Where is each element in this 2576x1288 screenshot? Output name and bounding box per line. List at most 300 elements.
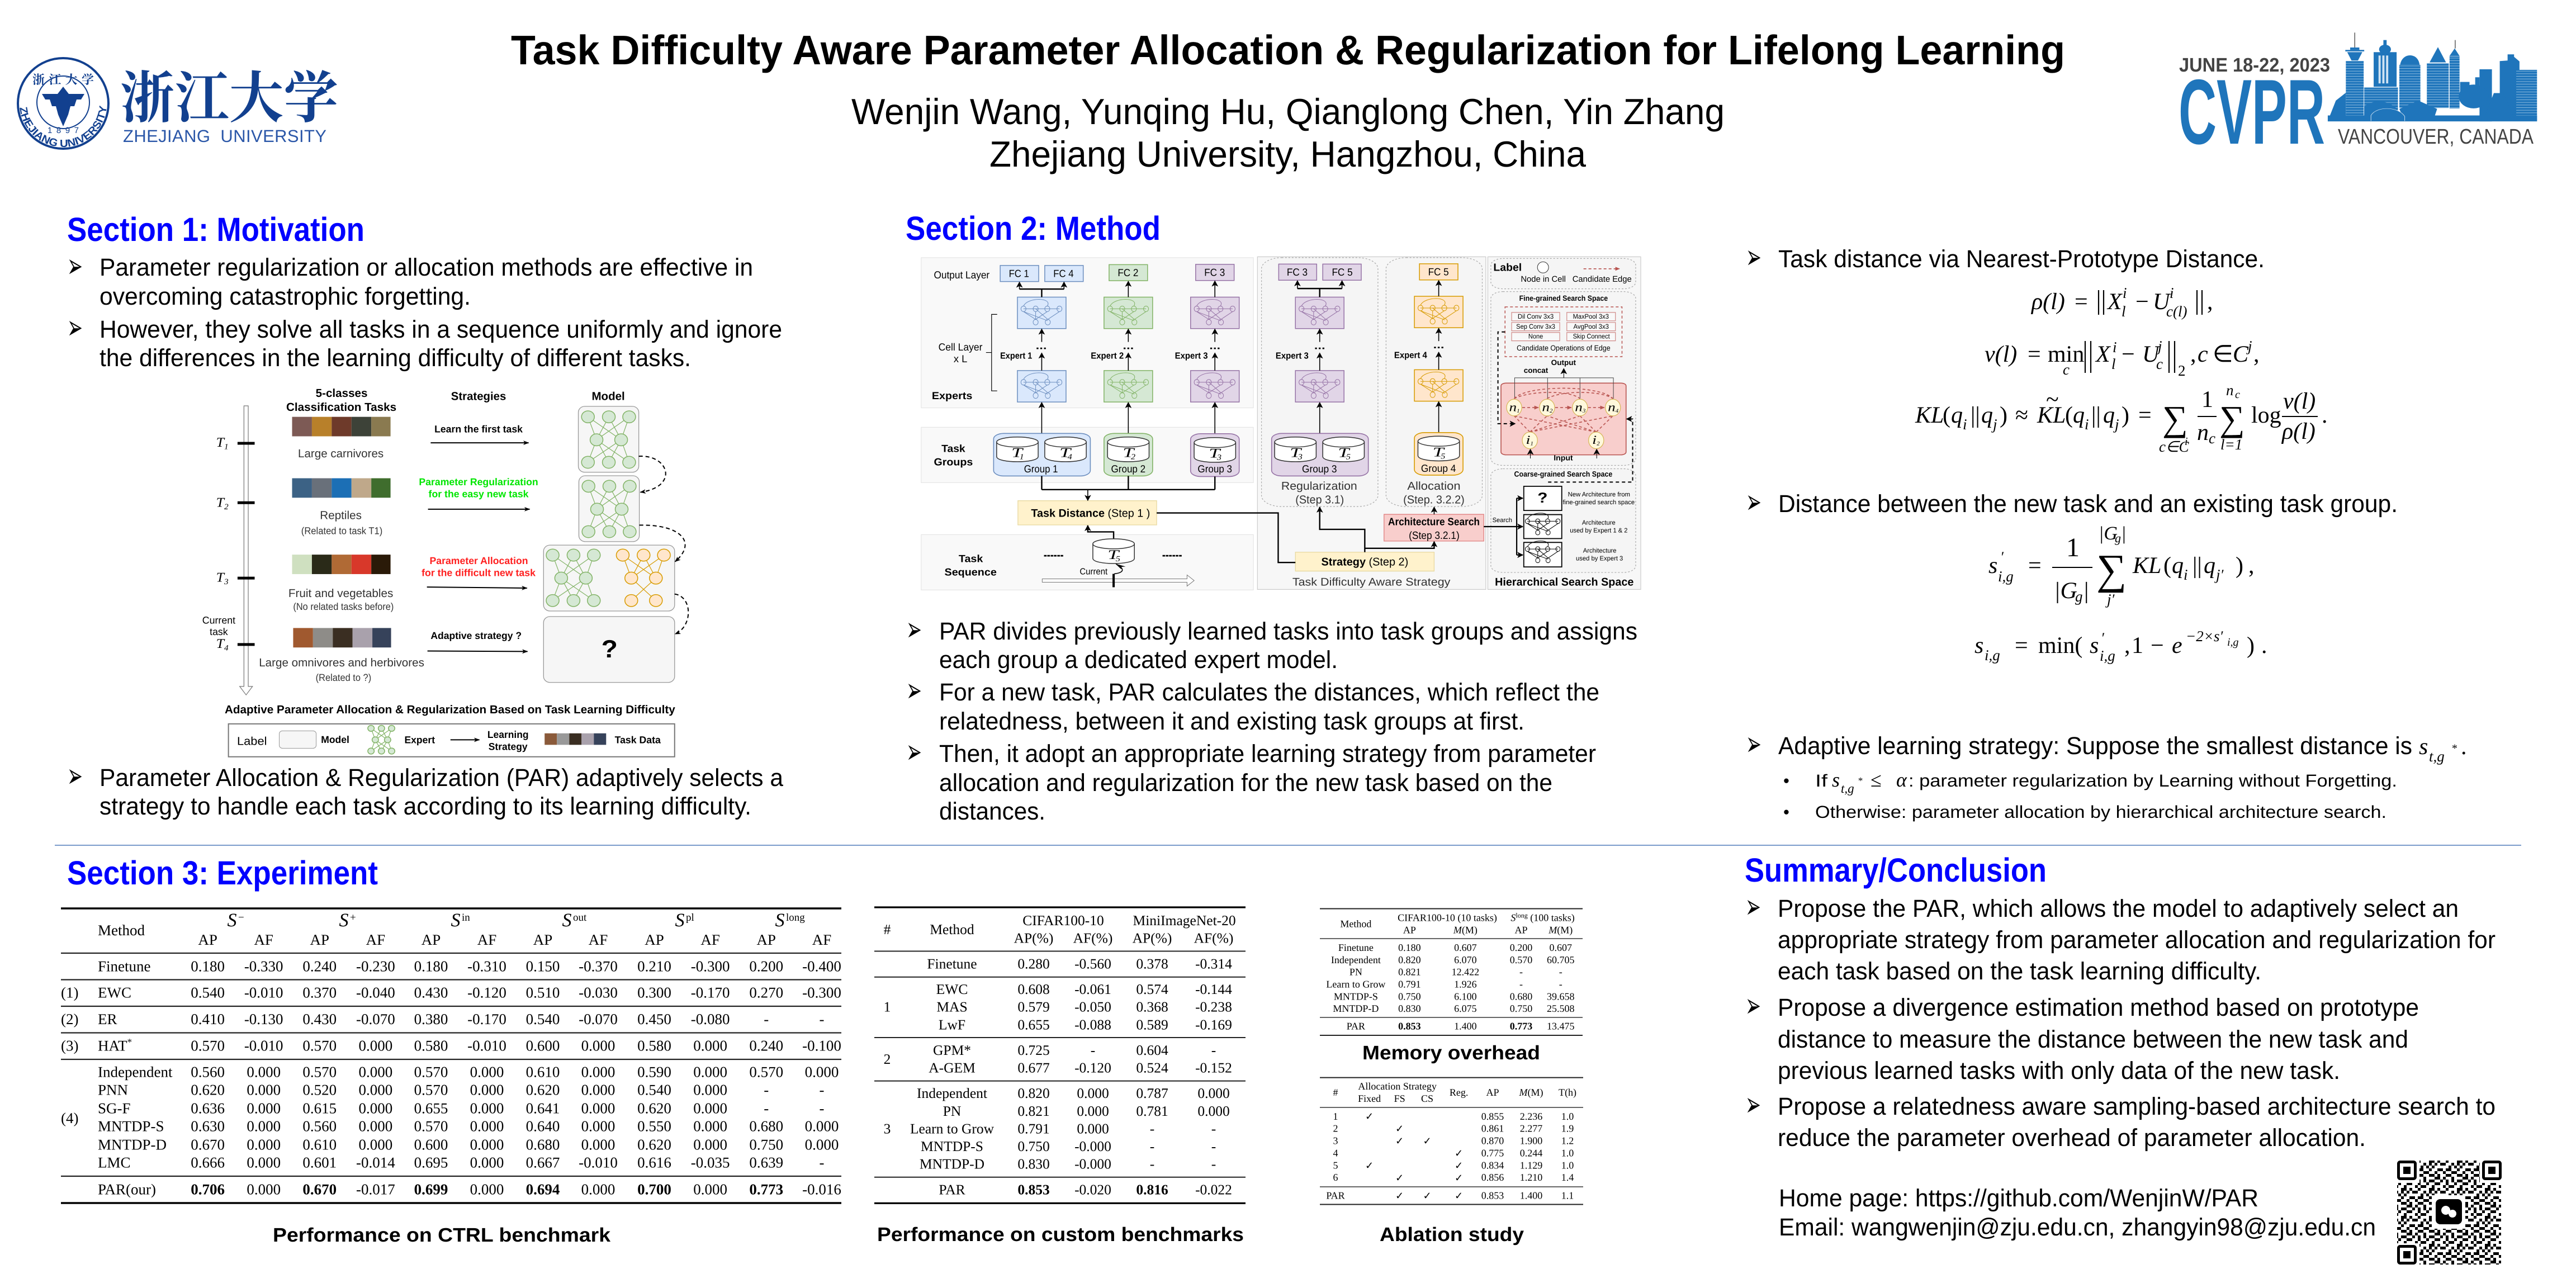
task groups: 5 bbox=[1441, 452, 1445, 461]
table rows: 0.680 bbox=[749, 1118, 783, 1135]
table rows: (2) bbox=[61, 1011, 78, 1027]
text block: conclusion bullets: Propose the PAR, which allows the model to adaptively select an bbox=[1778, 895, 2459, 922]
table: ablation study: 1.4 bbox=[1561, 1172, 1574, 1183]
fine-grained search space: 3 bbox=[1582, 408, 1585, 414]
table: memory overhead: S bbox=[1510, 912, 1516, 924]
coarse-grained search space bbox=[1484, 470, 1635, 567]
text block: adaptive learning strategy: ➢ bbox=[1746, 724, 1761, 764]
table rows: PN bbox=[943, 1103, 961, 1119]
equation: KL divergence: ) bbox=[2000, 402, 2007, 428]
table: ablation study: 0.856 bbox=[1481, 1172, 1504, 1183]
text block: adaptive learning strategy: s bbox=[1832, 769, 1840, 791]
table rows: 0.368 bbox=[1136, 999, 1168, 1015]
equation: nu: , bbox=[2253, 342, 2260, 367]
task labels: Current bbox=[202, 615, 235, 626]
logo: Zhejiang University: 1897 bbox=[48, 126, 79, 135]
expert labels: Expert 3 bbox=[1175, 351, 1208, 361]
table: memory overhead: Learn to Grow bbox=[1326, 978, 1385, 989]
equation: KL divergence: n bbox=[2197, 420, 2209, 446]
table: ablation study: 1.400 bbox=[1520, 1190, 1542, 1201]
table rows: A-GEM bbox=[929, 1060, 976, 1076]
table rows: 0.677 bbox=[1017, 1060, 1050, 1076]
table: memory overhead: 0.607 bbox=[1550, 942, 1572, 953]
table rows: -0.314 bbox=[1195, 955, 1232, 972]
table rows: 0.666 bbox=[191, 1154, 225, 1171]
table: memory overhead: AP bbox=[1514, 925, 1528, 936]
coarse-grained search space: Search bbox=[1493, 517, 1512, 524]
equation: s prime: ∑ bbox=[2096, 546, 2127, 593]
equation: s: s bbox=[2090, 633, 2099, 659]
table rows: 0.670 bbox=[191, 1136, 225, 1153]
architecture search box: Architecture Search bbox=[1388, 516, 1480, 528]
table rows: -0.130 bbox=[244, 1011, 283, 1027]
table rows: ER bbox=[98, 1011, 117, 1027]
coarse-grained search space: fine-grained search space bbox=[1563, 499, 1635, 506]
text block: group distance bullet bbox=[1746, 482, 2398, 522]
table rows: 0.600 bbox=[414, 1136, 448, 1153]
table rows: 0.000 bbox=[470, 1100, 504, 1117]
text block: adaptive learning strategy: s bbox=[2419, 734, 2428, 760]
table header: − bbox=[238, 912, 244, 924]
section divider bbox=[55, 845, 2521, 846]
text block: task distance bullet bbox=[1746, 238, 2265, 277]
equation: KL divergence: || bbox=[2091, 402, 2101, 428]
equation: KL divergence: i bbox=[1963, 416, 1967, 433]
equation: s: i,g bbox=[1985, 647, 2000, 664]
fine-grained search space: 1 bbox=[1531, 441, 1533, 447]
equation: s prime: j′ bbox=[2105, 591, 2115, 608]
expert connection arrows bbox=[1020, 281, 1439, 434]
fine-grained search space: n bbox=[1575, 400, 1583, 414]
table: memory overhead: Finetune bbox=[1338, 942, 1374, 953]
table: ablation study: 1.0 bbox=[1561, 1159, 1574, 1171]
equation: s prime: g bbox=[2115, 531, 2121, 545]
table rows: 0.524 bbox=[1136, 1060, 1168, 1076]
text block: PAR summary bullet bbox=[67, 756, 784, 820]
logo: CVPR 2023: VANCOUVER, CANADA bbox=[2338, 125, 2534, 149]
equation: rho bbox=[2030, 285, 2213, 320]
table rows: -0.300 bbox=[691, 958, 730, 975]
text block: adaptive learning strategy: t,g bbox=[2429, 748, 2445, 765]
table: ablation study: 2.236 bbox=[1520, 1111, 1542, 1122]
table: memory overhead: - bbox=[1559, 978, 1562, 989]
table rows: -0.370 bbox=[579, 958, 618, 975]
table: memory overhead: MNTDP-D bbox=[1333, 1003, 1379, 1014]
task labels: T bbox=[216, 570, 224, 585]
table rows: (3) bbox=[61, 1038, 78, 1054]
table rows: LwF bbox=[939, 1016, 965, 1033]
expert labels: Expert 4 bbox=[1394, 350, 1427, 360]
table rows: 0.560 bbox=[191, 1063, 225, 1080]
table rows: Independent bbox=[98, 1063, 173, 1080]
text block: motivation bullets: Parameter regularization or allocation methods are effective in bbox=[100, 254, 753, 281]
table rows: 0.280 bbox=[1017, 955, 1050, 972]
table: memory overhead: 39.658 bbox=[1547, 991, 1575, 1002]
coarse-grained search space: Coarse-grained Search Space bbox=[1514, 470, 1612, 478]
equation: KL divergence: i bbox=[2185, 435, 2188, 448]
table header: AF bbox=[254, 931, 273, 948]
task labels: task bbox=[210, 627, 229, 637]
table rows: 0.000 bbox=[247, 1118, 281, 1135]
table rows: -0.020 bbox=[1074, 1182, 1111, 1198]
figure caption: Adaptive Parameter Allocation & Regularization Based on Task Learning Difficulty bbox=[225, 703, 675, 716]
table rows: -0.238 bbox=[1195, 999, 1232, 1015]
table rows: 0.180 bbox=[414, 958, 448, 975]
text block: adaptive learning strategy: If bbox=[1815, 771, 1827, 790]
table rows: 0.000 bbox=[470, 1181, 504, 1197]
equation: s prime: | bbox=[2084, 578, 2089, 604]
equation: KL divergence: ≈ bbox=[2015, 402, 2028, 428]
task groups bbox=[993, 433, 1463, 476]
equation: rho: i bbox=[2170, 285, 2174, 301]
table: ablation study: ✓ bbox=[1365, 1111, 1374, 1123]
task groups: 5 bbox=[1346, 453, 1351, 461]
task sequence: 5 bbox=[1116, 555, 1120, 564]
search space legend: Label bbox=[1493, 262, 1522, 273]
equation: rho: X bbox=[2106, 289, 2123, 315]
table: memory overhead: (M) bbox=[1462, 925, 1478, 936]
text block: method bullets: ➢ bbox=[906, 671, 922, 710]
table rows: MAS bbox=[936, 999, 968, 1015]
fine-grained search space bbox=[1501, 294, 1626, 462]
table rows: - bbox=[1211, 1138, 1216, 1154]
table rows: -0.170 bbox=[467, 1011, 506, 1027]
task groups: 2 bbox=[1131, 453, 1135, 461]
equation: nu: v(l) bbox=[1985, 342, 2017, 367]
table rows: MNTDP-S bbox=[98, 1118, 164, 1135]
fine-grained search space: Input bbox=[1554, 454, 1573, 462]
table rows: 0.000 bbox=[247, 1154, 281, 1171]
table rows: 0.510 bbox=[526, 984, 560, 1001]
table: ablation study: 1.900 bbox=[1520, 1135, 1542, 1146]
text block: conclusion bullets: reduce the parameter overhead of parameter allocation. bbox=[1778, 1124, 2366, 1152]
table rows: 0.000 bbox=[581, 1038, 615, 1054]
table rows: MNTDP-D bbox=[920, 1156, 984, 1172]
table: memory overhead: (100 tasks) bbox=[1528, 912, 1575, 924]
table rows: -0.169 bbox=[1195, 1016, 1232, 1033]
table header: AP(%) bbox=[1014, 930, 1053, 946]
table: ablation study: ✓ bbox=[1423, 1190, 1432, 1202]
table rows: -0.152 bbox=[1195, 1060, 1232, 1076]
table rows: 0.000 bbox=[1077, 1103, 1109, 1119]
table rows: 0.000 bbox=[359, 1038, 392, 1054]
table header: AF(%) bbox=[1073, 930, 1112, 946]
text block: motivation bullets: However, they solve all tasks in a sequence uniformly and ignore bbox=[100, 316, 782, 343]
equation: s prime: ′ bbox=[2000, 548, 2004, 565]
search space legend: Node in Cell bbox=[1521, 274, 1566, 284]
table: memory overhead: long bbox=[1516, 912, 1528, 920]
fine-grained search space: Candidate Operations of Edge bbox=[1517, 344, 1611, 352]
table header: Method bbox=[98, 922, 145, 939]
task names: (No related tasks before) bbox=[293, 602, 394, 613]
text block: motivation bullets: the differences in the learning difficulty of different tasks. bbox=[100, 344, 691, 372]
table rows: 0.150 bbox=[526, 958, 560, 975]
fine-grained search space: MaxPool 3x3 bbox=[1573, 312, 1609, 320]
table rows: -0.560 bbox=[1074, 955, 1111, 972]
table rows: 0.699 bbox=[414, 1181, 448, 1197]
strategy labels: (Step 3.1) bbox=[1295, 493, 1344, 506]
table rows: 0.640 bbox=[526, 1118, 560, 1135]
row labels bbox=[932, 269, 997, 578]
table rows: -0.070 bbox=[579, 1011, 618, 1027]
equation: s: ′ bbox=[2101, 629, 2105, 646]
equation: KL divergence: c bbox=[2209, 430, 2215, 447]
column headers: 5-classes bbox=[316, 386, 367, 399]
table: memory overhead: - bbox=[1519, 967, 1523, 978]
strategy labels and arrows: Learn the first task bbox=[434, 424, 523, 435]
row labels: Cell Layer bbox=[939, 342, 982, 353]
output layers: FC 5 bbox=[1428, 266, 1449, 278]
equation: KL divergence: ~ bbox=[2046, 387, 2059, 413]
strategy box: Strategy (Step 2) bbox=[1321, 556, 1408, 568]
table rows: - bbox=[820, 1154, 824, 1171]
strategy labels: (Step. 3.2.2) bbox=[1403, 493, 1465, 506]
table rows: 0.410 bbox=[191, 1011, 225, 1027]
table rows: 0.000 bbox=[581, 1136, 615, 1153]
output layers bbox=[1000, 264, 1458, 282]
table: ablation study: FS bbox=[1394, 1093, 1405, 1104]
equation: KL divergence: log bbox=[2251, 402, 2281, 428]
task names: (Related to ?) bbox=[316, 673, 371, 684]
task sequence: Current bbox=[1079, 566, 1107, 576]
table: memory overhead: PN bbox=[1349, 967, 1362, 978]
text block: contact: Email: wangwenjin@zju.edu.cn, zhangyin98@zju.edu.cn bbox=[1779, 1214, 2376, 1241]
table rows: 0.791 bbox=[1017, 1121, 1050, 1137]
table: ablation study: 4 bbox=[1333, 1148, 1338, 1159]
text block: motivation bullets: ➢ bbox=[67, 308, 83, 347]
caption: custom benchmarks: Performance on custom benchmarks bbox=[877, 1224, 1244, 1246]
table header: AP bbox=[310, 931, 329, 948]
coarse-grained search space: ? bbox=[1537, 490, 1547, 506]
table rows: 0.380 bbox=[414, 1011, 448, 1027]
table rows: 0.210 bbox=[637, 958, 671, 975]
output layers: FC 5 bbox=[1332, 267, 1353, 278]
table: ablation study bbox=[1320, 1078, 1583, 1204]
text block: group distance bullet: Distance between the new task and an existing task group. bbox=[1778, 490, 2398, 518]
equation: nu: U bbox=[2142, 342, 2161, 367]
table: memory overhead: - bbox=[1519, 978, 1523, 989]
table: ablation study: 0.244 bbox=[1520, 1148, 1542, 1159]
table: ablation study: 2.277 bbox=[1520, 1123, 1542, 1134]
table rows: 0.240 bbox=[302, 958, 337, 975]
equation: s prime: 1 bbox=[2066, 533, 2080, 562]
table rows: 0.000 bbox=[693, 1100, 727, 1117]
table rows: 0.610 bbox=[526, 1063, 560, 1080]
table rows: 0.300 bbox=[637, 984, 671, 1001]
table rows: -0.120 bbox=[1074, 1060, 1111, 1076]
coarse-grained search space: used by Expert 1 & 2 bbox=[1570, 527, 1627, 534]
table: ablation study: # bbox=[1333, 1087, 1338, 1098]
equation: nu: c bbox=[2198, 342, 2208, 367]
output layers: FC 2 bbox=[1117, 267, 1138, 278]
search space legend bbox=[1493, 262, 1632, 284]
table: memory overhead: AP bbox=[1403, 925, 1416, 936]
table rows: 0.610 bbox=[302, 1136, 337, 1153]
task labels: T bbox=[216, 495, 224, 510]
table header: MiniImageNet-20 bbox=[1133, 912, 1236, 929]
text block: method bullets: ➢ bbox=[906, 610, 922, 649]
table rows: 0.000 bbox=[247, 1181, 281, 1197]
text block: adaptive learning strategy: Otherwise: parameter allocation by hierarchical architecture search. bbox=[1815, 802, 2386, 822]
table rows: 0.725 bbox=[1017, 1042, 1050, 1058]
table header: S bbox=[562, 910, 571, 931]
table header: AF bbox=[366, 931, 385, 948]
table: ablation study: Fixed bbox=[1358, 1093, 1381, 1104]
table header: AF bbox=[589, 931, 608, 948]
equation: s: ) bbox=[2247, 633, 2255, 659]
table rows: 0.540 bbox=[526, 1011, 560, 1027]
expert cells bbox=[1017, 296, 1463, 402]
table rows: - bbox=[820, 1011, 824, 1027]
equation: KL divergence: = bbox=[2138, 402, 2152, 428]
table: memory overhead: 1.400 bbox=[1454, 1021, 1477, 1032]
coarse-grained search space: Architecture bbox=[1582, 519, 1616, 526]
equation: s prime: KL bbox=[2132, 553, 2161, 579]
equation: rho: − bbox=[2135, 289, 2149, 315]
table rows: 0.680 bbox=[526, 1136, 560, 1153]
output layers: FC 3 bbox=[1287, 267, 1308, 278]
equation: KL divergence: j bbox=[1991, 416, 1997, 433]
table rows: 0.580 bbox=[637, 1038, 671, 1054]
task distance box: Task Distance (Step 1 ) bbox=[1031, 507, 1150, 519]
equation: s prime: i bbox=[2184, 566, 2188, 583]
table header: AF(%) bbox=[1194, 930, 1233, 946]
equation: KL divergence: n bbox=[2226, 382, 2234, 399]
table: ablation study: Reg. bbox=[1450, 1087, 1468, 1098]
table rows: 0.616 bbox=[637, 1154, 671, 1171]
architecture search box: (Step 3.2.1) bbox=[1409, 529, 1460, 541]
table: memory overhead: 0.853 bbox=[1398, 1021, 1421, 1032]
equation: s prime: j′ bbox=[2214, 566, 2224, 583]
table rows: 0.781 bbox=[1136, 1103, 1168, 1119]
table: ablation study: ✓ bbox=[1395, 1172, 1404, 1184]
table rows: 0.570 bbox=[414, 1063, 448, 1080]
table rows: 0.604 bbox=[1136, 1042, 1168, 1058]
table rows: Learn to Grow bbox=[910, 1121, 995, 1137]
strategy labels bbox=[1281, 479, 1465, 506]
table header: in bbox=[462, 912, 470, 924]
table: ablation study: 1.9 bbox=[1561, 1123, 1574, 1134]
task groups: T bbox=[1011, 446, 1024, 460]
task sequence: ...... bbox=[1043, 547, 1064, 559]
equation: KL divergence: ∑ bbox=[2162, 399, 2188, 438]
table rows: (4) bbox=[61, 1110, 78, 1126]
equation: KL divergence: || bbox=[1971, 402, 1980, 428]
equation: s prime: g bbox=[2075, 588, 2083, 605]
fine-grained search space: Fine-grained Search Space bbox=[1519, 294, 1608, 302]
equation: nu: l bbox=[2111, 356, 2116, 372]
text block: method bullets: Then, it adopt an appropriate learning strategy from parameter bbox=[939, 740, 1596, 768]
dashed transition arrows bbox=[639, 456, 688, 634]
heading: Section 3: Section 3: Experiment bbox=[67, 854, 378, 892]
equation: KL divergence: q bbox=[1981, 402, 1993, 428]
table rows: 0.570 bbox=[191, 1038, 225, 1054]
table rows: -0.310 bbox=[467, 958, 506, 975]
table header: long bbox=[786, 912, 805, 924]
logo: Zhejiang University: ZHEJIANG UNIVERSITY bbox=[20, 105, 106, 148]
expert labels: Expert 3 bbox=[1276, 351, 1309, 361]
table: ablation study: ✓ bbox=[1455, 1190, 1463, 1202]
table: ablation study: 1.129 bbox=[1520, 1159, 1542, 1171]
fine-grained search space: 2 bbox=[1550, 408, 1552, 414]
logo: Zhejiang University: 浙江大学 bbox=[32, 70, 94, 88]
table rows: -0.061 bbox=[1074, 981, 1111, 997]
table rows: MNTDP-D bbox=[98, 1136, 167, 1153]
table rows: -0.010 bbox=[244, 984, 283, 1001]
table rows: -0.070 bbox=[356, 1011, 395, 1027]
table: memory overhead: 0.750 bbox=[1510, 1003, 1532, 1014]
table rows: 0.270 bbox=[749, 984, 783, 1001]
table rows: - bbox=[764, 1081, 769, 1098]
text block: group distance bullet: ➢ bbox=[1746, 482, 1761, 522]
text block: conclusion bullets: ➢ bbox=[1745, 986, 1761, 1025]
equation: s prime: , bbox=[2248, 553, 2254, 579]
search space dashed links bbox=[1498, 332, 1633, 482]
equation: nu: j bbox=[2156, 338, 2162, 354]
table header: S bbox=[775, 910, 785, 931]
equation: nu: c bbox=[2063, 361, 2070, 378]
table rows: 0.820 bbox=[1017, 1085, 1050, 1101]
panel captions: Task Difficulty Aware Strategy bbox=[1292, 576, 1450, 588]
table: ablation study: ✓ bbox=[1455, 1172, 1463, 1184]
table rows: 0.773 bbox=[749, 1181, 783, 1197]
text block: conclusion bullets: each task based on the task learning difficulty. bbox=[1778, 958, 2261, 985]
table: memory overhead: PAR bbox=[1347, 1021, 1365, 1032]
table rows: GPM* bbox=[933, 1042, 971, 1058]
table rows: - bbox=[1211, 1042, 1216, 1058]
table: ablation study: T(h) bbox=[1559, 1087, 1576, 1098]
table rows: 0.000 bbox=[581, 1081, 615, 1098]
authors and affiliation: Wenjin Wang, Yunqing Hu, Qianglong Chen, Yin Zhang bbox=[851, 91, 1725, 132]
table rows: 0.000 bbox=[693, 1081, 727, 1098]
table rows: 0.639 bbox=[749, 1154, 783, 1171]
table rows: 0.589 bbox=[1136, 1016, 1168, 1033]
table rows: 0.180 bbox=[191, 958, 225, 975]
table rows: 0.000 bbox=[359, 1081, 392, 1098]
fine-grained search space: Output bbox=[1551, 358, 1576, 367]
table rows: 0.570 bbox=[414, 1081, 448, 1098]
equation: KL divergence: ∑ bbox=[2219, 399, 2245, 438]
equation: s bbox=[1974, 628, 2267, 664]
equation: s prime: |G bbox=[2099, 523, 2118, 544]
table: ablation study: ✓ bbox=[1395, 1135, 1404, 1147]
table: memory overhead: (M) bbox=[1557, 925, 1573, 936]
figure legend: Label bbox=[237, 735, 267, 747]
heading: Section 2: Section 2: Method bbox=[906, 210, 1161, 247]
table rows: 0.620 bbox=[191, 1081, 225, 1098]
column headers: Classification Tasks bbox=[286, 400, 396, 413]
caption: memory overhead: Memory overhead bbox=[1362, 1042, 1540, 1064]
table header: CIFAR100-10 bbox=[1022, 912, 1104, 929]
table header: AP bbox=[533, 931, 552, 948]
fine-grained search space: Dil Conv 3x3 bbox=[1518, 312, 1554, 320]
table: memory overhead: 1.926 bbox=[1454, 978, 1477, 989]
table: ablation study: 1.1 bbox=[1561, 1190, 1574, 1201]
table rows: 0.000 bbox=[470, 1136, 504, 1153]
table rows: - bbox=[764, 1011, 769, 1027]
fine-grained search space: 1 bbox=[1517, 408, 1520, 414]
search space legend: Candidate Edge bbox=[1573, 274, 1632, 284]
table rows: -0.050 bbox=[1074, 999, 1111, 1015]
logo: Zhejiang University: 浙江大学 bbox=[120, 67, 338, 130]
table rows: 0.378 bbox=[1136, 955, 1168, 972]
table rows: 0.636 bbox=[191, 1100, 225, 1117]
text block: adaptive learning strategy: * bbox=[1858, 775, 1863, 786]
output layers: FC 4 bbox=[1053, 268, 1074, 280]
table rows: - bbox=[1150, 1138, 1154, 1154]
table: ablation study: ✓ bbox=[1455, 1148, 1463, 1159]
table: ablation study: PAR bbox=[1326, 1190, 1345, 1201]
